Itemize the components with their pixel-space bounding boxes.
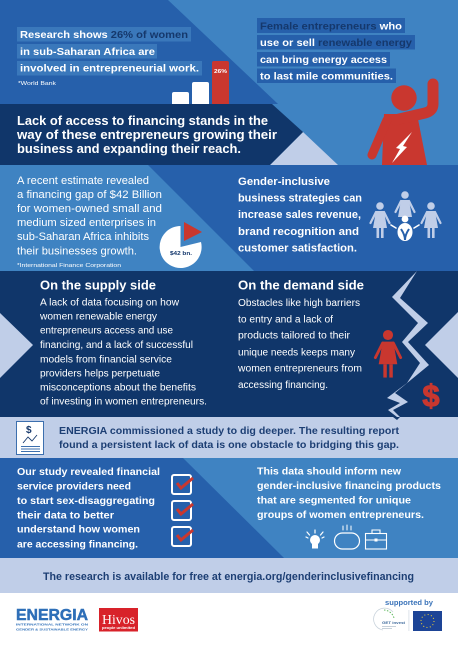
icon: checklist — [172, 475, 193, 546]
supply side text: women renewable energy — [39, 312, 157, 322]
demand side text: to entry and a lack of — [238, 314, 333, 325]
pale triangle — [270, 132, 338, 165]
data should inform text: groups of women entrepreneurs. — [257, 509, 424, 521]
banner: lack of access: Lack of access to financing stands in the — [17, 113, 268, 128]
financing gap text: A recent estimate revealed — [17, 175, 149, 187]
pie chart: $42 bn — [160, 222, 202, 268]
icon: cooking pot — [334, 525, 360, 549]
financing gap text — [17, 175, 162, 269]
financing gap text: sub-Saharan Africa inhibits — [17, 231, 149, 243]
panel: supply and demand — [0, 271, 458, 417]
study text: found a persistent lack of data is one obstacle to bridging this gap. — [59, 439, 399, 451]
data should inform text: that are segmented for unique — [257, 494, 411, 506]
research statistic text: in sub-Saharan Africa are — [20, 46, 155, 58]
icon: dollar sign: $ — [422, 378, 440, 413]
icon: red woman with raised arm — [372, 84, 433, 165]
study text: ENERGIA commissioned a study to dig deeper. The resulting report — [59, 425, 400, 437]
left pale arrow — [0, 313, 33, 378]
bar chart: 26%: 26% — [214, 69, 227, 75]
panel: intro — [0, 0, 458, 165]
research statistic text: Research shows 26% of women — [20, 29, 188, 41]
icon: financial report — [16, 422, 44, 454]
gender-inclusive strategies text: brand recognition and — [238, 226, 359, 238]
financing gap text: for women-owned small and — [17, 203, 162, 215]
study text — [59, 425, 400, 451]
icon: three women and baby — [370, 191, 440, 241]
study findings text: are accessing financing. — [17, 538, 138, 550]
supply side text: financing, and a lack of successful — [40, 340, 193, 351]
icon: red woman — [375, 330, 401, 378]
supply side text: of investing in women entrepreneurs. — [40, 397, 207, 408]
financing gap text: medium sized enterprises in — [17, 217, 156, 229]
study findings text — [17, 466, 160, 550]
logo: GET invest: GET invest — [382, 620, 406, 625]
bar chart: 26% — [172, 61, 229, 104]
demand side text: Obstacles like high barriers — [238, 298, 360, 309]
logo: Hivos — [99, 608, 138, 632]
icon: light bulb — [306, 530, 324, 548]
study findings text: their data to better — [17, 509, 114, 521]
female entrepreneurs text: to last mile communities. — [260, 70, 393, 82]
gender-inclusive strategies text — [238, 176, 362, 254]
data should inform text: This data should inform new — [257, 465, 402, 477]
demand side text: On the demand side — [238, 278, 364, 292]
supply side text — [39, 278, 207, 408]
study findings text: service providers need — [17, 480, 131, 492]
data should inform text: gender-inclusive financing products — [257, 480, 441, 492]
panel: financing gap and strategies — [0, 165, 458, 271]
demand side text: women entrepreneurs from — [237, 364, 362, 375]
banner: lack of access — [0, 104, 303, 165]
gender-inclusive strategies text: customer satisfaction. — [238, 242, 357, 254]
demand side text: products tailored to their — [238, 331, 351, 342]
financing gap text: *International Finance Corporation — [17, 263, 121, 269]
demand side text — [237, 278, 364, 391]
demand side text: accessing financing. — [238, 380, 328, 391]
supply side text: On the supply side — [40, 278, 156, 292]
female entrepreneurs text: Female entrepreneurs who — [260, 20, 402, 32]
study findings text: Our study revealed financial — [17, 466, 160, 478]
divider — [408, 610, 410, 631]
banner: lack of access: business and expanding their reach. — [17, 141, 241, 156]
supply side text: misconceptions about the benefits — [40, 383, 196, 394]
female entrepreneurs text: can bring energy access — [260, 54, 387, 66]
gender-inclusive strategies text: increase sales revenue, — [238, 209, 361, 221]
icon: briefcase — [366, 530, 386, 549]
panel: ENERGIA study — [0, 417, 458, 458]
logo: Hivos: people unlimited — [102, 626, 135, 630]
research statistic text: *World Bank — [18, 81, 57, 87]
logo: ENERGIA: GENDER & SUSTAINABLE ENERGY — [16, 628, 88, 632]
banner: lack of access: way of these entrepreneurs growing their — [16, 127, 277, 142]
panel: call to action: The research is available for free at energia.org/genderinclusivefinancing — [43, 571, 414, 583]
gender-inclusive strategies text: Gender-inclusive — [238, 176, 330, 188]
female entrepreneurs text: use or sell renewable energy — [260, 37, 412, 49]
research statistic text — [17, 27, 202, 87]
crack — [387, 271, 429, 417]
demand side text: unique needs keeps many — [238, 347, 355, 358]
icon: financial report: $ — [26, 425, 32, 436]
data should inform text — [257, 465, 441, 521]
logo: ENERGIA — [16, 607, 88, 632]
supply side text: entrepreneurs access and use — [40, 326, 173, 337]
female entrepreneurs text — [257, 18, 415, 83]
supply side text: models from financial service — [40, 354, 172, 365]
supply side text: providers helps perpetuate — [40, 368, 160, 379]
supply side text: A lack of data focusing on how — [40, 297, 180, 308]
research statistic text: involved in entrepreneurial work. — [20, 62, 199, 74]
gender-inclusive strategies text: business strategies can — [238, 192, 362, 204]
panel: study recommendations — [0, 458, 458, 558]
logo: ENERGIA: ENERGIA — [16, 607, 88, 624]
pie chart: $42 bn: $42 bn. — [170, 251, 193, 257]
logo: EU flag — [413, 611, 442, 631]
study findings text: to start sex-disaggregating — [17, 495, 155, 507]
logo: Hivos: Hivos — [102, 613, 135, 628]
panel: call to action — [0, 558, 458, 593]
logo: GET invest — [374, 608, 406, 630]
financing gap text: a financing gap of $42 Billion — [17, 189, 162, 201]
logo: ENERGIA: INTERNATIONAL NETWORK ON — [16, 622, 88, 626]
supported by label: supported by — [385, 598, 434, 607]
study findings text: understand how women — [17, 524, 140, 536]
financing gap text: their businesses growth. — [17, 246, 137, 258]
right pale arrow — [425, 312, 458, 378]
